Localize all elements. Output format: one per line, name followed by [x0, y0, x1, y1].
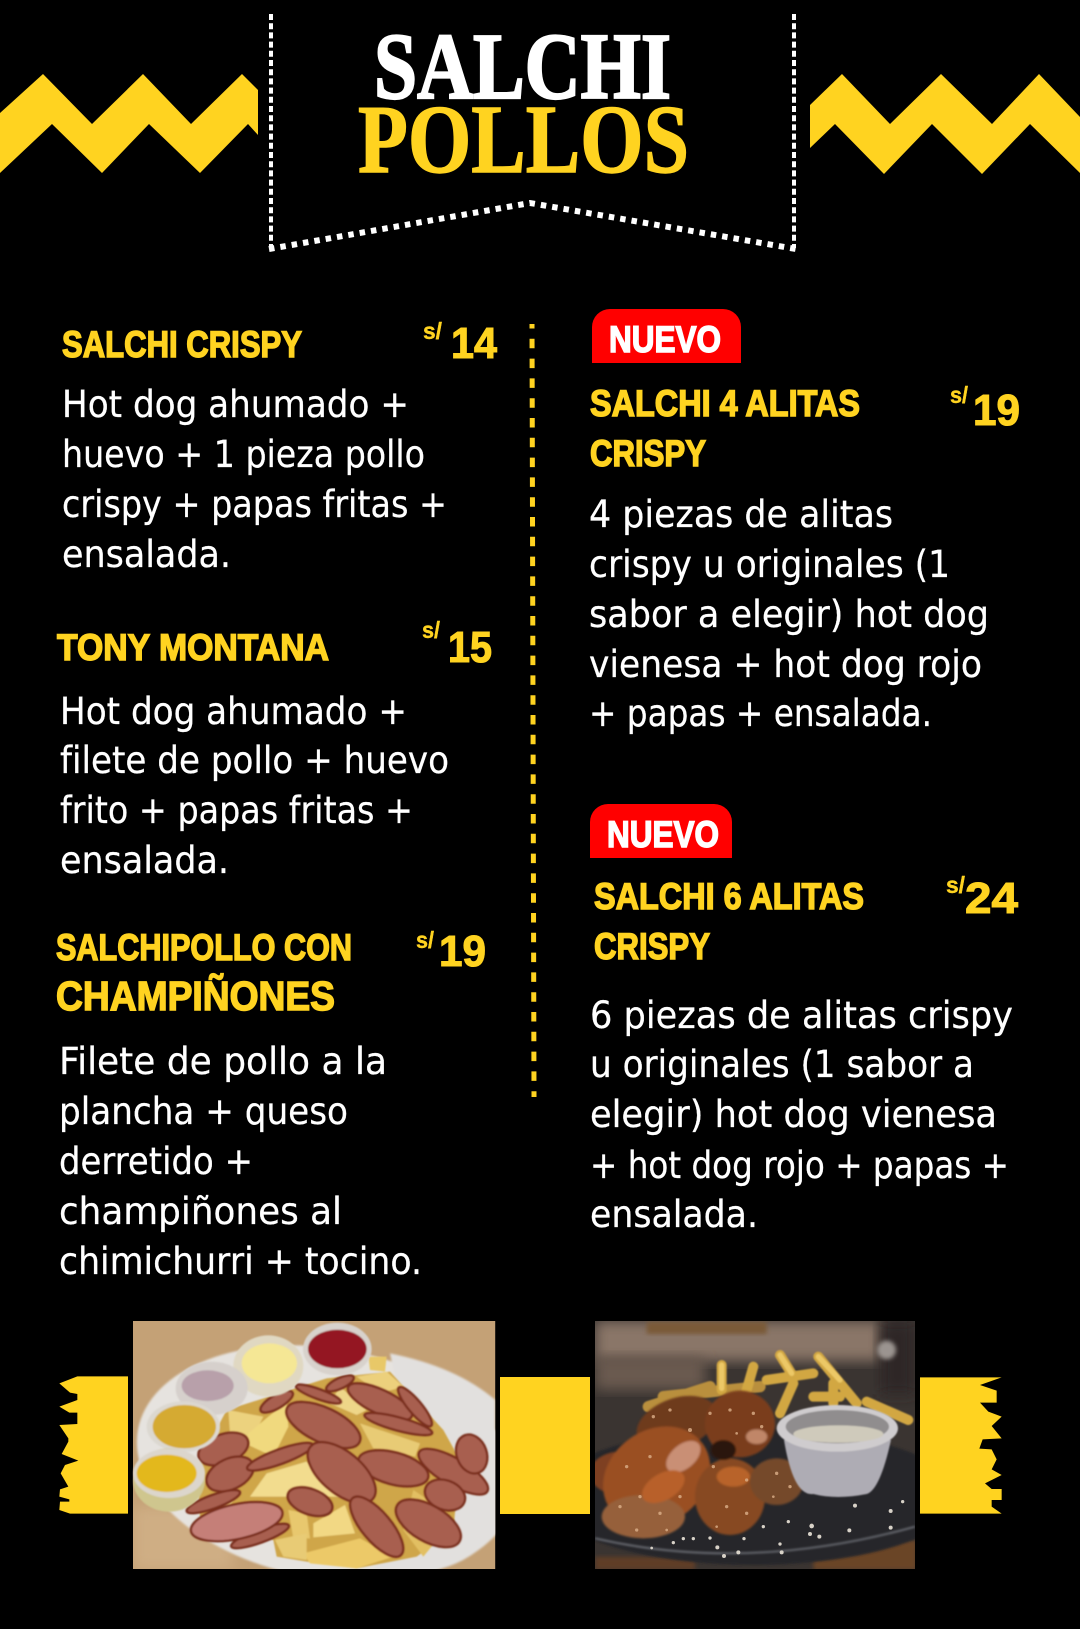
- dotted title frame: [269, 14, 796, 249]
- menu item: Salchi Crispy: [62, 318, 497, 576]
- heading: CRISPY: [594, 925, 710, 967]
- heading: CHAMPIÑONES: [56, 973, 335, 1019]
- title: POLLOS: [358, 86, 689, 194]
- price: [422, 617, 492, 672]
- heading: TONY MONTANA: [57, 626, 329, 668]
- fries: [648, 1355, 908, 1420]
- title: SALCHI: [374, 15, 671, 119]
- menu item: Tony Montana: [57, 617, 492, 882]
- price: s/: [946, 872, 966, 898]
- description: champiñones al: [59, 1190, 342, 1233]
- heading: SALCHIPOLLO CON: [56, 926, 352, 968]
- description: + papas + ensalada.: [589, 692, 932, 735]
- sesame seeds: [650, 1500, 904, 1558]
- heading: SALCHI 6 ALITAS: [594, 875, 864, 917]
- price: [423, 318, 497, 368]
- sausage slices: [184, 1372, 494, 1565]
- photo: crispy wings with dip: [595, 1321, 915, 1569]
- center dashed divider: [532, 324, 534, 1097]
- badge: nuevo: NUEVO: [607, 813, 719, 855]
- heading: [590, 382, 860, 474]
- slate plate: [595, 1429, 915, 1566]
- badge: nuevo: [592, 309, 741, 363]
- description: [589, 493, 989, 735]
- dip cup: [777, 1405, 898, 1497]
- price: s/: [423, 318, 443, 344]
- description: [60, 690, 449, 882]
- description: plancha + queso: [59, 1090, 348, 1133]
- wings: [595, 1389, 802, 1540]
- right zigzag banner: [810, 74, 1080, 174]
- description: [62, 383, 447, 576]
- sauce cups: [133, 1323, 372, 1512]
- heading: [594, 875, 864, 967]
- right torn yellow band: [920, 1377, 1002, 1514]
- description: Filete de pollo a la: [59, 1040, 387, 1083]
- price: 19: [439, 927, 486, 976]
- description: Hot dog ahumado +: [62, 383, 409, 426]
- description: frito + papas fritas +: [60, 789, 413, 832]
- price: s/: [416, 927, 435, 953]
- menu item: Salchi 6 alitas crispy: [590, 804, 1019, 1236]
- description: + hot dog rojo + papas +: [590, 1144, 1009, 1187]
- description: derretido +: [59, 1140, 253, 1183]
- description: vienesa + hot dog rojo: [589, 643, 982, 686]
- potatoes: [197, 1357, 460, 1568]
- left torn yellow band: [59, 1376, 128, 1514]
- heading: SALCHI CRISPY: [62, 323, 302, 365]
- description: [59, 1040, 422, 1283]
- middle yellow band: [500, 1377, 590, 1514]
- badge: nuevo: NUEVO: [609, 318, 721, 360]
- price: s/: [422, 617, 441, 643]
- menu item: Salchipollo con champiñones: [56, 926, 486, 1283]
- wing crumbs: [618, 1408, 792, 1532]
- heading: [56, 926, 352, 1019]
- description: ensalada.: [62, 533, 231, 576]
- description: chimichurri + tocino.: [59, 1240, 422, 1283]
- heading: CRISPY: [590, 432, 706, 474]
- badge: nuevo: [590, 804, 732, 858]
- left zigzag banner: [0, 74, 258, 173]
- description: 4 piezas de alitas: [589, 493, 893, 536]
- description: elegir) hot dog vienesa: [590, 1093, 997, 1136]
- price: [950, 382, 1020, 435]
- description: ensalada.: [60, 839, 229, 882]
- price: 24: [965, 874, 1019, 923]
- description: crispy + papas fritas +: [62, 483, 447, 526]
- price: [946, 872, 1019, 923]
- description: Hot dog ahumado +: [60, 690, 407, 733]
- description: sabor a elegir) hot dog: [589, 593, 989, 636]
- description: u originales (1 sabor a: [590, 1043, 974, 1086]
- heading: SALCHI 4 ALITAS: [590, 382, 860, 424]
- description: filete de pollo + huevo: [60, 739, 449, 782]
- title: [358, 15, 689, 194]
- plate: [136, 1344, 496, 1569]
- description: 6 piezas de alitas crispy: [590, 994, 1013, 1037]
- description: ensalada.: [590, 1193, 758, 1236]
- price: 15: [448, 623, 492, 672]
- description: huevo + 1 pieza pollo: [62, 433, 425, 476]
- price: s/: [950, 382, 969, 408]
- description: crispy u originales (1: [589, 543, 950, 586]
- price: [416, 927, 486, 976]
- price: 14: [451, 319, 497, 368]
- photo: salchipapa plate with sauces: [132, 1321, 496, 1569]
- menu item: Salchi 4 alitas crispy: [589, 309, 1020, 735]
- price: 19: [973, 386, 1020, 435]
- description: [590, 994, 1013, 1236]
